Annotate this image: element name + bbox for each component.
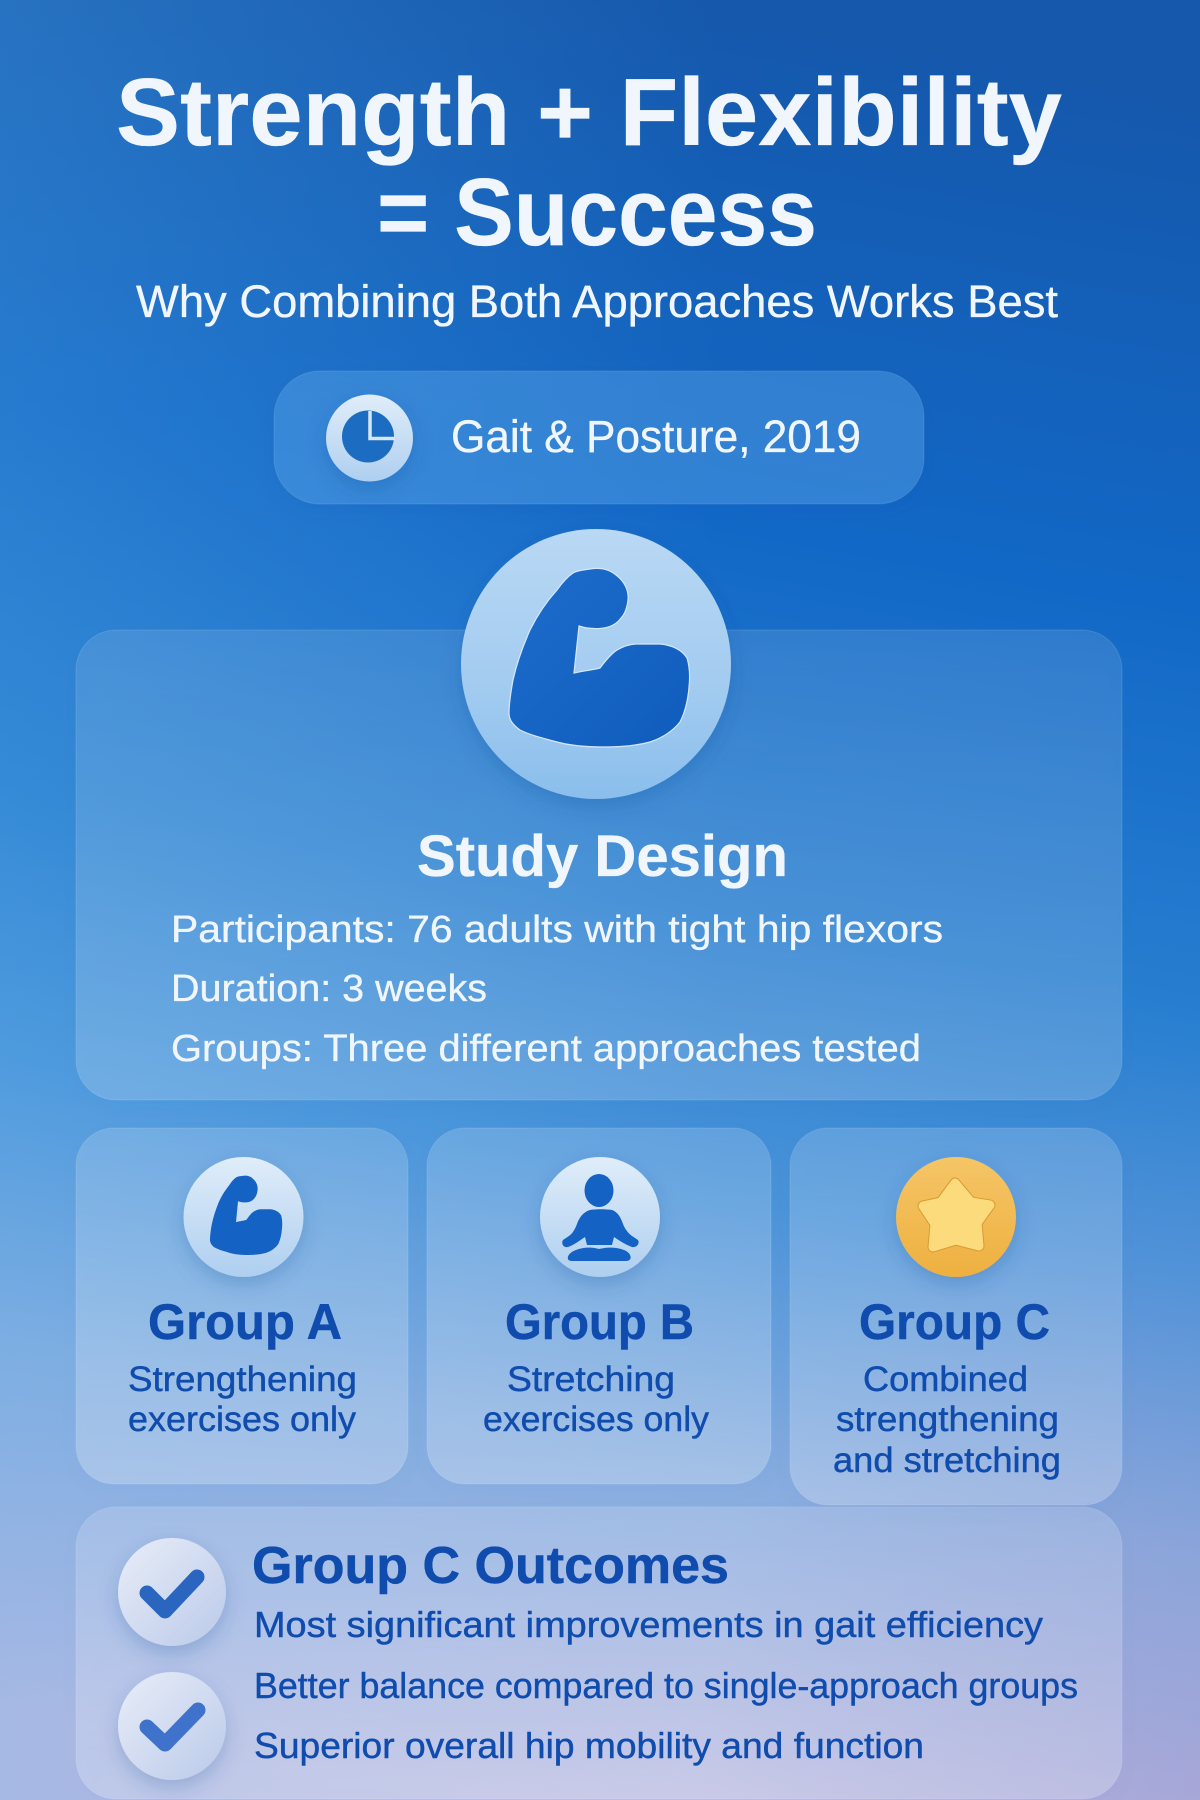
title: = Success — [377, 159, 817, 266]
group A heading: Group A — [148, 1294, 342, 1350]
study design details — [171, 909, 943, 1070]
outcomes heading: Group C Outcomes — [252, 1537, 729, 1595]
study design heading: Study Design — [417, 824, 788, 889]
panel: study design — [76, 529, 1122, 1100]
group B description — [483, 1360, 710, 1439]
group C description: Combined — [863, 1360, 1028, 1399]
group C description: and stretching — [833, 1441, 1061, 1480]
study design details: Participants: 76 adults with tight hip flexors — [171, 909, 943, 951]
icon: check mark 2 — [118, 1672, 226, 1780]
icon: star — [896, 1157, 1016, 1277]
icon: flexed arm small — [184, 1157, 304, 1277]
subtitle: Why Combining Both Approaches Works Best — [136, 276, 1058, 327]
panel: group B — [427, 1128, 771, 1484]
panel: group C — [790, 1128, 1122, 1505]
source text: Gait & Posture, 2019 — [451, 411, 861, 462]
title — [116, 59, 1062, 266]
outcomes list: Most significant improvements in gait efficiency — [254, 1604, 1043, 1645]
icon: meditating person — [540, 1157, 660, 1277]
group C heading: Group C — [859, 1294, 1050, 1350]
group A description: exercises only — [128, 1400, 357, 1439]
group B heading: Group B — [505, 1294, 694, 1350]
title: Strength + Flexibility — [116, 59, 1062, 166]
source badge — [274, 371, 924, 504]
group A description: Strengthening — [128, 1360, 357, 1399]
group C description: strengthening — [836, 1400, 1059, 1439]
outcomes list — [254, 1604, 1078, 1766]
study design details: Duration: 3 weeks — [171, 968, 487, 1010]
panel: group C outcomes — [76, 1507, 1122, 1799]
group A description — [128, 1360, 357, 1439]
group B description: exercises only — [483, 1400, 710, 1439]
panel: group A — [76, 1128, 408, 1484]
study design details: Groups: Three different approaches tested — [171, 1028, 921, 1070]
icon: clock — [326, 394, 413, 482]
icon: check mark 1 — [118, 1538, 226, 1646]
outcomes list: Superior overall hip mobility and function — [254, 1725, 924, 1766]
group B description: Stretching — [507, 1360, 675, 1399]
outcomes list: Better balance compared to single-approach groups — [254, 1665, 1078, 1706]
group C description — [833, 1360, 1061, 1480]
icon: flexed arm — [461, 529, 731, 799]
